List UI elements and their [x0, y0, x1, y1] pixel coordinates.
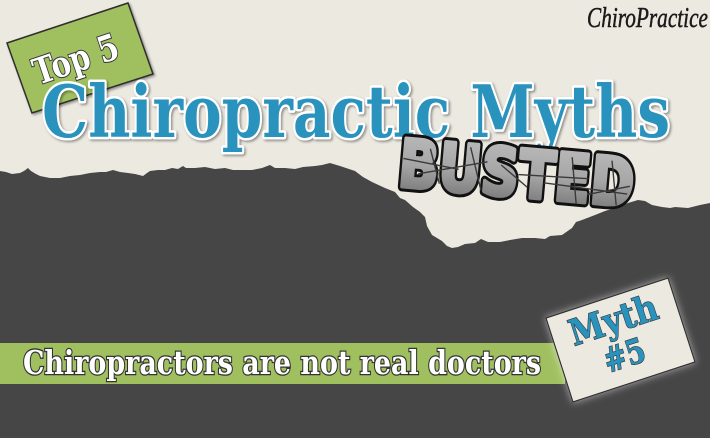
- green banner: [0, 343, 565, 384]
- myth label: Myth: [564, 286, 663, 355]
- banner text: Chiropractors are not real doctors: [23, 343, 541, 382]
- busted stamp: BUSTED: [396, 125, 637, 223]
- myth card: [546, 278, 695, 402]
- torn dark panel: [0, 163, 710, 438]
- card label: Top 5: Top 5: [28, 26, 124, 94]
- busted stamp: BUSTED: [396, 125, 637, 223]
- myth number: #5: [598, 331, 651, 382]
- green card: Top 5: [7, 3, 153, 113]
